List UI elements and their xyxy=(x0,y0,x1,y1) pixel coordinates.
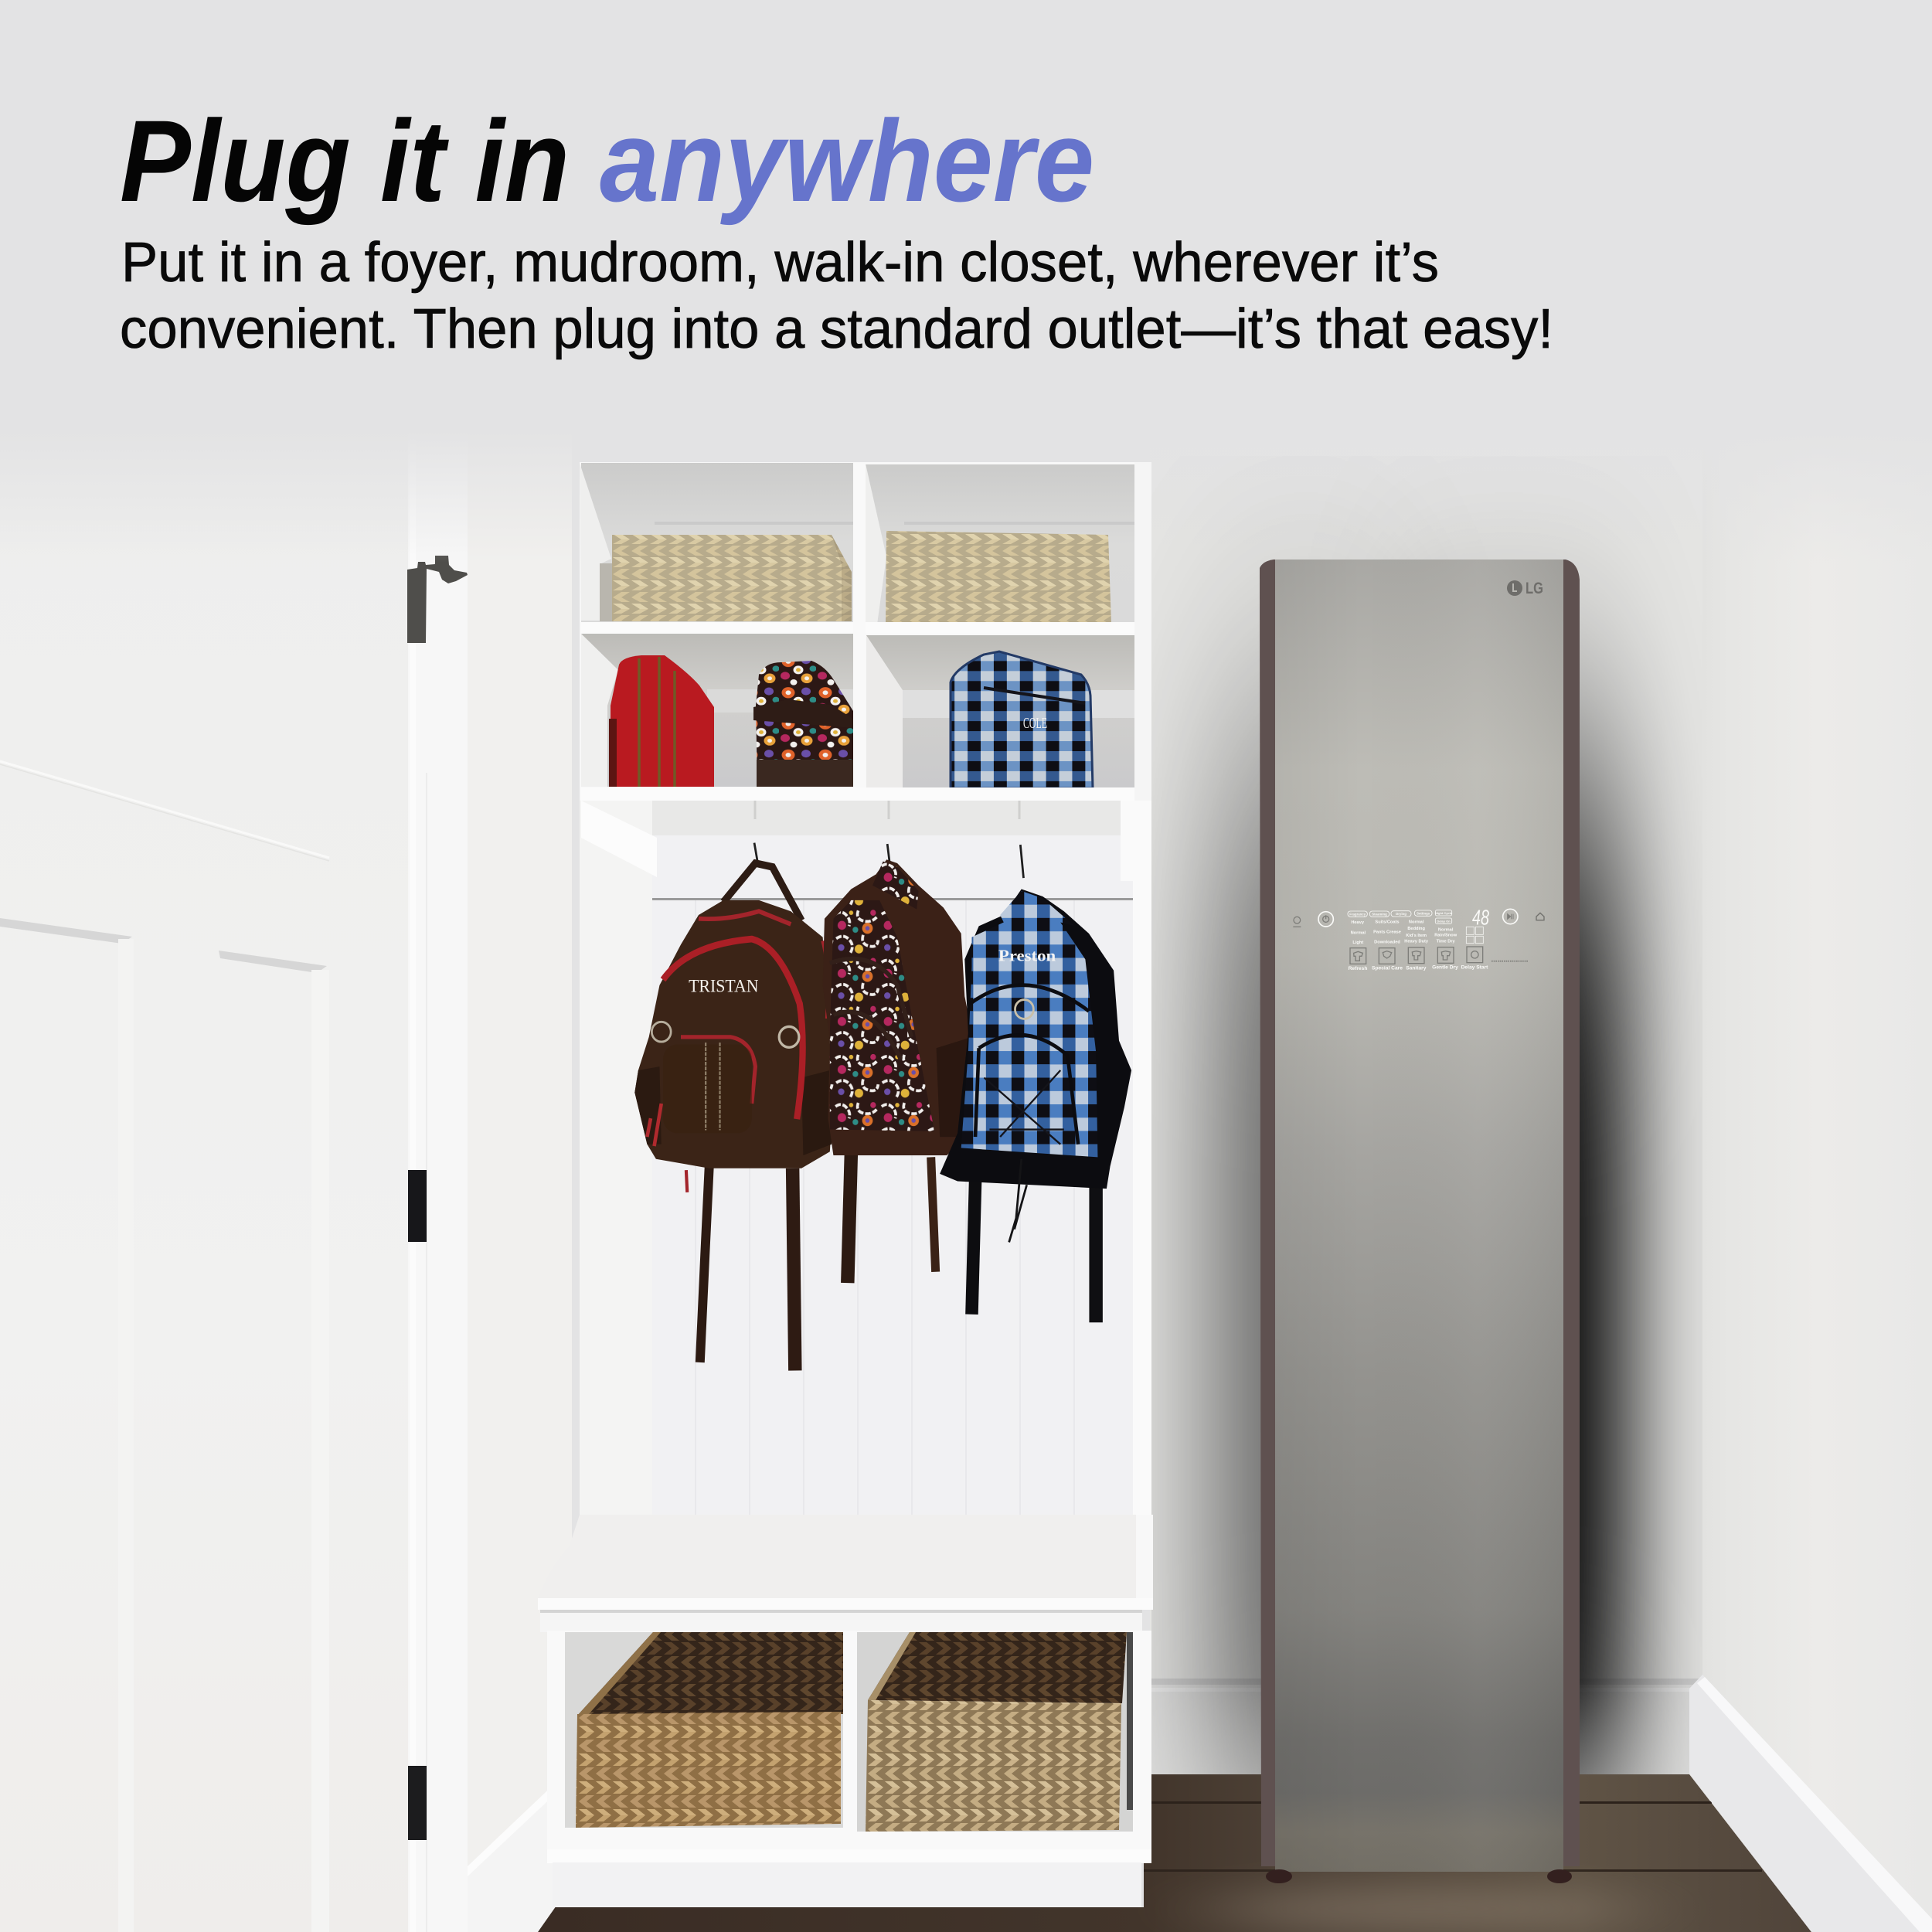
lower cubby: right xyxy=(857,1632,1133,1832)
cubby: top left xyxy=(580,463,853,622)
control panel xyxy=(1293,906,1544,971)
mode pills: Steaming xyxy=(1372,912,1387,916)
wall left of cabinet xyxy=(468,433,572,1932)
mode pills: Drying xyxy=(1396,912,1406,916)
subtitle text: convenient. Then plug into a standard outlet—it’s that easy! xyxy=(120,298,1553,360)
status boxes xyxy=(1466,927,1483,944)
title: Plug it in xyxy=(120,96,570,226)
subtitle text: Put it in a foyer, mudroom, walk-in closet, wherever it’s xyxy=(121,232,1439,294)
name: TRISTAN: TRISTAN xyxy=(689,976,759,996)
mode pills: Delay On xyxy=(1437,919,1451,923)
cabinet frame xyxy=(580,462,1151,1606)
backpack: Preston plaid xyxy=(940,889,1131,1322)
cycle buttons xyxy=(1350,947,1483,964)
cubby: second row left xyxy=(581,634,853,787)
cubby: top right xyxy=(866,464,1134,624)
feet xyxy=(1266,1869,1572,1883)
shelves xyxy=(581,462,1151,802)
backpack: floral xyxy=(823,859,974,1283)
lower cubby: left xyxy=(565,1632,843,1828)
floral lunch bag xyxy=(753,661,853,787)
white door xyxy=(0,433,410,1932)
cycle labels: Delay Start xyxy=(1461,964,1488,970)
hinge: bottom xyxy=(408,1766,427,1840)
name: COLE: COLE xyxy=(1023,715,1047,732)
cycle labels xyxy=(1349,964,1488,971)
cycle option lists: Heavy xyxy=(1351,920,1365,925)
mode pills xyxy=(1348,910,1453,923)
door frame xyxy=(408,433,468,1932)
cycle labels: Refresh xyxy=(1349,966,1367,971)
hinge: top xyxy=(407,556,468,643)
mode pills: Fragrancy xyxy=(1349,912,1366,916)
mudroom cabinet xyxy=(538,462,1153,1907)
backpacks and hooks xyxy=(634,843,1131,1370)
cycle option lists: Suits/Coats xyxy=(1375,920,1400,924)
cycle option lists: Light xyxy=(1352,940,1363,945)
back-wall baseboard xyxy=(1150,1679,1702,1774)
cycle option lists: Bedding xyxy=(1407,927,1426,931)
cycle option lists: Downloaded xyxy=(1374,940,1400,944)
icon: power button xyxy=(1318,912,1333,927)
cycle labels: Gentle Dry xyxy=(1432,965,1458,971)
cycle labels: Special Care xyxy=(1372,965,1403,971)
body sides xyxy=(1260,560,1580,1866)
mode pills: Settings xyxy=(1417,911,1430,915)
mirror door xyxy=(1275,560,1563,1872)
icon: home xyxy=(1536,913,1544,920)
hook board and beadboard xyxy=(580,801,1151,1604)
cycle option lists: Kid's Item xyxy=(1406,934,1427,938)
cycle option lists: Time Dry xyxy=(1437,939,1456,944)
cycle labels: Sanitary xyxy=(1406,965,1427,971)
cycle option lists: Pants Crease xyxy=(1373,930,1401,934)
woven basket: top right xyxy=(886,531,1111,624)
top fade of room into title area xyxy=(0,431,1932,563)
back wall behind appliance xyxy=(1150,433,1706,1777)
wood floor xyxy=(538,1774,1811,1932)
title xyxy=(120,96,1094,226)
cycle option lists: Normal xyxy=(1438,927,1454,932)
right side wall xyxy=(1702,433,1932,1932)
woven basket: top left xyxy=(600,535,852,621)
title: anywhere xyxy=(600,96,1094,226)
subtitle text xyxy=(120,232,1553,360)
hooks xyxy=(754,843,1023,878)
LG logo xyxy=(1507,580,1543,597)
cubby: second row right xyxy=(866,635,1134,788)
mode pills: Night Cycle xyxy=(1435,911,1453,915)
cabinet base xyxy=(547,1849,1151,1907)
time display: 48 xyxy=(1472,906,1489,930)
LG steam closet appliance xyxy=(1260,560,1580,1883)
name: Preston: Preston xyxy=(998,947,1056,964)
small dashed legend xyxy=(1492,960,1528,963)
backpack: TRISTAN xyxy=(634,863,833,1370)
cycle option lists: Normal xyxy=(1351,930,1366,935)
bench xyxy=(538,1515,1153,1851)
cycle option lists: Rain/Snow xyxy=(1434,934,1458,938)
hinge: middle xyxy=(408,1170,427,1242)
cycle option lists xyxy=(1351,920,1458,945)
plaid lunch bag xyxy=(951,651,1093,788)
appliance cast shadows xyxy=(1151,773,1702,1932)
left baseboard xyxy=(468,1781,558,1932)
cycle option lists: Normal xyxy=(1409,920,1424,924)
icon: left wifi tag xyxy=(1293,917,1301,927)
cycle option lists: Heavy Duty xyxy=(1404,940,1429,944)
right baseboard xyxy=(1689,1675,1932,1932)
LG logo: LG xyxy=(1526,580,1543,597)
red lunch bag xyxy=(609,655,714,787)
icon: start pause button xyxy=(1503,909,1518,924)
